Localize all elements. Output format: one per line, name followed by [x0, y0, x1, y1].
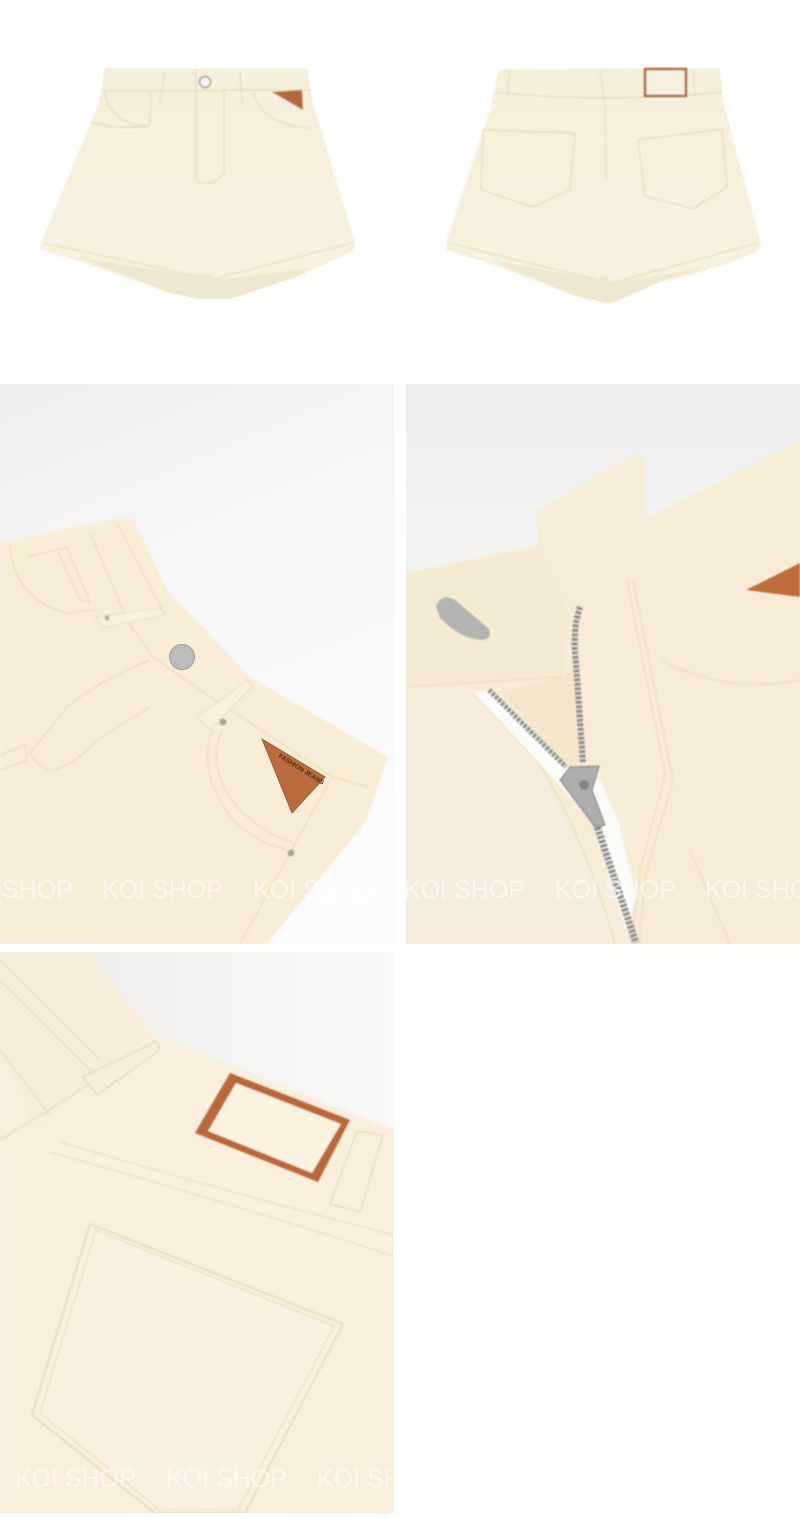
panel: detail photo, back pocket: [0, 952, 394, 1513]
fabric body: [406, 440, 800, 944]
watermark: KOI SHOP: [404, 876, 525, 904]
panel: detail photo, front pocket: [0, 384, 394, 944]
icon: leather rectangle patch: [195, 1073, 350, 1182]
icon: back leather patch: [645, 69, 686, 96]
watermark: KOI SHOP: [253, 876, 374, 904]
icon: zipper teeth: [489, 607, 636, 943]
watermark: [17, 1469, 394, 1487]
icon: metal button: [436, 597, 490, 640]
watermark: KOI SHOP: [166, 1465, 287, 1493]
fabric body: [0, 517, 388, 944]
watermark: KOI SHOP: [15, 1465, 136, 1493]
icon: triangle leather tag: [262, 739, 326, 813]
watermark: KOI SHOP: [317, 1465, 438, 1493]
fabric body: [0, 952, 394, 1513]
watermark: [3, 880, 317, 898]
product photo: shorts front view: [40, 68, 355, 299]
icon: white zipper tape: [473, 690, 636, 930]
icon: triangle leather tag: FASHION JEANS: [277, 753, 326, 787]
icon: triangle leather tag: [272, 90, 303, 110]
watermark: KOI SHOP: [555, 876, 676, 904]
product photo: shorts back view: [446, 68, 761, 303]
watermark: [406, 880, 800, 898]
watermark: KOI SHOP: [102, 876, 223, 904]
icon: metal button: [170, 644, 194, 670]
icon: leather tag: [746, 563, 800, 597]
panel: detail photo, zipper: [404, 384, 800, 944]
icon: metal button: [200, 76, 210, 88]
